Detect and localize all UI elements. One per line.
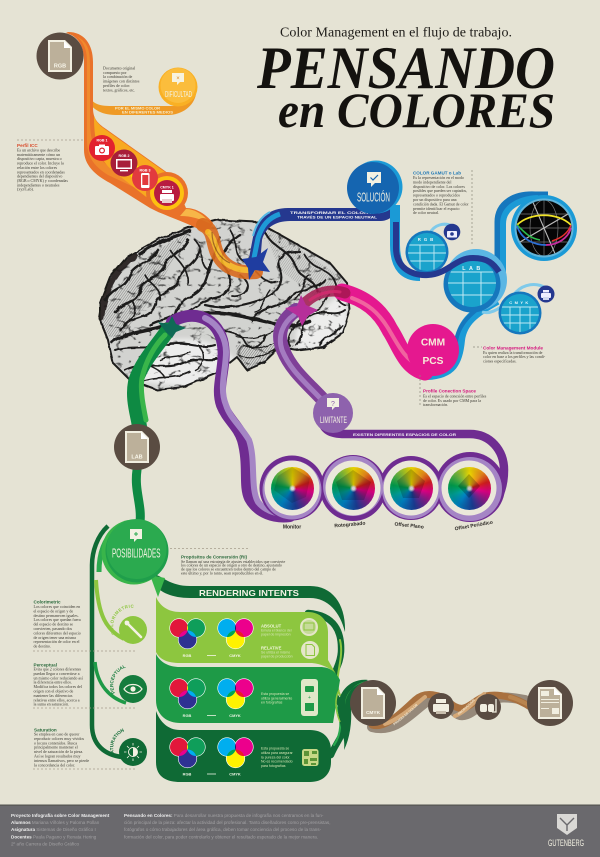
green ribbon: brain to lab	[134, 316, 186, 522]
wheel: monitor: Monitor	[283, 524, 301, 530]
text: perfil icc	[17, 140, 84, 192]
cmyk 1 badge: CMYK 1	[160, 186, 174, 190]
wheel: monitor	[264, 460, 320, 530]
solucion circle	[347, 160, 402, 214]
navy wave ribbon over tables	[396, 222, 499, 275]
dificultad circle: DIFICULTAD	[165, 89, 192, 99]
saturation node: SATURATION	[110, 728, 124, 753]
venn cmyk row 3	[217, 737, 254, 768]
footer description: Pensando en Colores: Para desarrollar nuestra propuesta de infografía nos centramos en la fun-	[124, 813, 323, 818]
blue ribbon: solucion to brain: TRAVÉS DE UN ESPACIO NEUTRAL	[297, 215, 378, 220]
panel: perceptual: CMYK	[229, 713, 241, 718]
footer description: formación del color, para poder controlarlo y obtener el resultado esperado de la mejor manera.	[124, 834, 318, 839]
dificultad circle	[158, 68, 198, 106]
text: colorimetric: representación de color en el	[34, 639, 80, 644]
brain illustration	[95, 215, 355, 395]
rgb 2 badge	[110, 150, 146, 178]
cmyk table circle: CMYK	[509, 300, 531, 305]
text: documento original: compuesto por	[103, 70, 127, 75]
subtitle: Color Management en el flujo de trabajo.	[280, 24, 512, 40]
posibilidades circle	[102, 519, 168, 584]
text: color gamut: condición dada. El Gamut de color	[413, 201, 469, 206]
text: profile conection space	[420, 375, 487, 407]
cmyk table circle	[498, 292, 542, 334]
limitante band: EXISTEN DIFERENTES ESPACIOS DE COLOR	[353, 432, 456, 437]
text: perceptual: Modifica todos los colores del	[34, 684, 83, 689]
panel: saturation: CMYK	[229, 772, 241, 776]
panel: absolut relative: Emula el blanco del	[261, 628, 292, 632]
purple ribbon: brain to wheels	[172, 316, 290, 516]
text: saturation: nivel de saturación de la pieza.	[34, 749, 83, 754]
text: perceptual: Evita que 2 colores diferentes	[34, 666, 81, 672]
text: documento original: textos, gráficos, etc.	[103, 87, 135, 93]
text: perfil icc: Perfil ICC	[17, 143, 38, 148]
doc circle: rgb: RGB	[54, 64, 66, 70]
text: perceptual	[33, 662, 135, 708]
text: documento original: perfiles de color:	[103, 83, 130, 88]
text: colorimetric: de destino.	[34, 644, 51, 649]
text: colorimetric: de origen tener una misma	[34, 635, 76, 640]
cmm pcs circle: CMM	[421, 338, 445, 348]
doc circle: cmyk	[350, 680, 396, 726]
dificultad circle: ×	[176, 76, 180, 82]
footer credits: Docentes Paula Pagano y Renata Hering	[11, 834, 96, 839]
panel: perceptual: en fotografías	[261, 701, 283, 705]
text: color gamut: de color neutral.	[413, 210, 439, 215]
text: perceptual: la suma en saturación.	[34, 702, 69, 706]
cmyk circle halo	[146, 172, 188, 214]
icon card: qr pattern	[302, 749, 318, 766]
text: color management module	[473, 346, 546, 364]
green arrow head	[158, 316, 186, 338]
doc circle: cmyk: CMYK	[366, 710, 381, 716]
doc circle: final print	[527, 680, 573, 726]
title	[256, 24, 555, 138]
text: color gamut: Es la representación en el modo	[413, 175, 464, 180]
orange ribbon: rgb to brain	[66, 32, 213, 234]
text: propositos de conversion: Se llaman así una estrategia de ajustes establecidos que convierte	[181, 559, 286, 564]
text: perceptual: un mismo color reduciendo así	[34, 675, 84, 680]
lab doc circle: LAB	[131, 454, 143, 460]
panel: saturation: RGB	[183, 772, 192, 776]
text: documento original: imágenes con distintos	[103, 79, 140, 84]
icon card: camera and image: +	[308, 695, 311, 701]
orange branch to dificultad: EN DIFERENTES MEDIOS	[122, 111, 174, 115]
orange ribbon inside brain	[203, 225, 256, 272]
rgb 2 badge: RGB 2	[119, 154, 129, 158]
footer description: fotógrafos o cómo trabajadores del área gráfica, deben tomar conciencia del proceso de la trans-	[124, 827, 322, 832]
text: propositos de conversion: los colores de un espacio de origen a otro de destino, ajustando	[181, 563, 282, 569]
rgb table circle: RGB	[418, 237, 436, 242]
cmyk 1 badge	[154, 180, 180, 206]
text: perfil icc: independientes o neutrales	[17, 182, 60, 187]
rgb 1 badge: RGB 1	[97, 138, 107, 142]
limitante band	[321, 418, 504, 512]
pink arrow head	[285, 295, 318, 326]
blue gamut ribbons	[395, 197, 548, 375]
limitante circle: ?	[331, 401, 335, 408]
wheel: rotograbado	[326, 460, 380, 529]
lab doc circle	[114, 424, 160, 470]
colorimetric node: COLORIMETRIC	[110, 604, 134, 635]
text: profile conection space: de color. Es usado por CMM para la	[423, 398, 481, 403]
pink ribbon: cmm to brain	[306, 291, 425, 372]
text: color management module: Color Management Module	[483, 346, 543, 350]
text: perfil icc: Es un archivo que describe	[17, 148, 60, 152]
text: profile conection space: Es el espacio de conexión entre perfiles	[423, 394, 487, 398]
main title line 1: PENSANDO	[256, 35, 555, 101]
venn rgb row 1	[169, 618, 206, 649]
venn rgb row 3	[169, 737, 206, 768]
text: saturation: principalmente mantener el	[34, 745, 79, 750]
wheel: offset periodico: Offset Periódico	[454, 520, 493, 532]
text: perfil icc: (xyz/Lab).	[17, 187, 34, 192]
text: saturation	[33, 728, 135, 769]
purple arrow: limitante to brain	[280, 295, 325, 402]
panel: saturation: utiliza para asegurar	[261, 751, 294, 755]
text: colorimetric: Los colores que quedan fuera	[34, 617, 81, 622]
wheel: offset plano: Offset Plano	[394, 521, 424, 531]
text: perceptual: origen con el objetivo de	[34, 688, 73, 694]
venn rgb row 2	[169, 678, 206, 709]
text: color gamut: modo independiente del	[413, 179, 452, 184]
wheel: offset periodico	[442, 460, 496, 532]
text: colorimetric: Colorimetric	[34, 600, 61, 604]
lab table circle	[444, 249, 507, 312]
footer credits: Asignatura Sistemas de Diseño Gráfico I	[11, 827, 96, 832]
text: colorimetric: destino permanecen iguales.	[34, 613, 79, 618]
text: profile conection space: Profile Conection Space	[423, 388, 476, 394]
rendering intents band	[150, 575, 345, 632]
text: color gamut: dispositivo de color. Los colores	[413, 184, 465, 189]
brown twisted ribbon: PRUEBA DE COLOR	[393, 704, 418, 726]
text: colorimetric: Los colores que coinciden en	[34, 604, 80, 609]
text: saturation: Se emplea en caso de querer	[34, 732, 80, 736]
text: perfil icc: dispositivo capta, muestra o	[17, 156, 62, 162]
panel: perceptual: Esta propuesta se	[261, 692, 289, 696]
icon: books circle	[475, 694, 501, 720]
posibilidades circle: POSIBILIDADES	[112, 546, 160, 560]
rgb 3 badge	[132, 165, 158, 191]
text: color gamut: permite identificar el espacio	[413, 206, 460, 211]
text: colorimetric: del espacio de destino se	[34, 622, 73, 627]
text: colorimetric: el espacio de origen y de	[34, 608, 73, 613]
panel: absolut relative: papel de impresión	[261, 632, 291, 636]
icon: printer circle	[428, 693, 454, 719]
sphere gamut	[511, 195, 577, 261]
doc circle: rgb	[36, 32, 84, 80]
orange branch to dificultad: POR EL MISMO COLOR	[115, 106, 160, 110]
rendering intents band: RENDERING INTENTS	[199, 589, 300, 598]
color wheels	[260, 452, 505, 532]
text: color gamut: por un dispositivo para una	[413, 197, 457, 202]
text: profile conection space: transformación.	[423, 402, 448, 407]
icon: camera	[444, 224, 460, 240]
solucion circle: SOLUCIÓN	[357, 190, 390, 204]
text: perceptual: relativas entre ellos, acerca a	[34, 697, 80, 703]
gutenberg logo	[548, 814, 584, 848]
icon card: camera and image	[301, 679, 318, 716]
wheel chain backing	[260, 452, 505, 522]
text: propositos de conversion	[170, 548, 286, 576]
text: documento original: la combinación de	[103, 74, 133, 79]
text: perceptual: puedan llegar a convertirse a	[34, 671, 80, 676]
panel: absolut relative: papel de producción	[261, 654, 293, 658]
footer credits: 2º año Carrera de Diseño Gráfico	[11, 842, 80, 847]
text: perfil icc: representados en coordenadas	[17, 169, 65, 174]
text: perceptual: Perceptual	[34, 662, 57, 668]
rgb 1 badge	[89, 135, 115, 161]
panel: absolut relative: RELATIVE	[261, 646, 282, 650]
text: perceptual: la diferencia entre ellos.	[34, 680, 72, 685]
perceptual node	[110, 665, 147, 703]
perceptual node: PERCEPTUAL	[110, 665, 126, 694]
text: colorimetric	[33, 600, 135, 651]
rgb 3 badge: RGB 3	[140, 168, 150, 172]
panel: absolut relative: CMYK	[229, 653, 241, 658]
text: saturation: la concordancia del color.	[34, 762, 75, 767]
blue ribbon: solucion to brain	[242, 205, 396, 280]
text: propositos de conversion: este último y, por lo tanto, sean reproducibles en él.	[181, 570, 263, 576]
venn cmyk row 2	[217, 678, 254, 709]
footer description: ción principal de la pieza: afectar la actividad del profesional. Tanto diseñadores como pre-prensistas,	[124, 820, 330, 825]
text: perfil icc: matemáticamente cómo un	[17, 152, 60, 157]
venn cmyk row 1	[217, 618, 254, 649]
text: saturation: Saturation	[34, 728, 57, 732]
text: perfil icc: reproduce el color. Incluye la	[17, 161, 64, 166]
text: saturation: o locura contenidos. Busca	[34, 740, 77, 745]
panel: perceptual	[156, 654, 340, 723]
cmm pcs circle: PCS	[423, 356, 444, 367]
panel: saturation: Esta propuesta se	[261, 746, 289, 750]
saturation node	[110, 728, 147, 766]
footer	[0, 804, 600, 857]
panel: saturation: la pureza del color.	[261, 755, 290, 759]
text: perfil icc: relación entre los colores	[17, 165, 58, 170]
brown twisted ribbon	[367, 691, 528, 734]
text: saturation: intensos llamativos, pero se pierde	[34, 758, 89, 764]
icon: printer	[538, 286, 554, 302]
blue arrow head	[242, 248, 270, 280]
text: color management module: Es quien realiza la transformación de	[483, 350, 543, 355]
cmm pcs circle	[407, 324, 459, 376]
blue ribbon: solucion to brain: TRANSFORMAR EL COLOR A	[290, 210, 374, 215]
green tree branches	[92, 526, 126, 757]
text: colorimetric: convierten, pasando dos	[34, 626, 72, 632]
panel: absolut relative: ABSOLUT	[261, 624, 282, 628]
text: saturation: Así se logran resultados muy	[34, 754, 80, 758]
text: color management module: ciones especificadas.	[483, 358, 517, 364]
panel: saturation	[156, 711, 331, 782]
panel: saturation: No es recomendado	[261, 760, 293, 764]
right green ribbons	[308, 613, 345, 755]
text: color gamut: representados o reproducidos	[413, 193, 460, 198]
limitante circle: LIMITANTE	[320, 415, 347, 426]
text: color management module: color en base a los perfiles y las condi-	[483, 354, 546, 359]
text: color gamut	[413, 170, 472, 245]
orange branch to dificultad	[86, 90, 196, 115]
text: perfil icc: dependientes del dispositivo	[17, 174, 62, 179]
wheel: rotograbado: Rotograbado	[334, 521, 366, 529]
main title line 2: en COLORES	[278, 82, 555, 138]
brown twisted ribbon: PRODUCCIÓN	[458, 698, 475, 715]
footer credits: Alumnos Mariana Viñoles y Paloma Pollan	[11, 820, 99, 825]
text: saturation: reproducir colores muy vívidos	[34, 736, 85, 741]
icon: monitor	[300, 618, 318, 636]
panel: perceptual: utiliza generalmente	[261, 696, 292, 700]
rgb table circle	[406, 230, 448, 274]
footer credits: Proyecto Infografía sobre Color Management	[11, 813, 110, 818]
text: color gamut: COLOR GAMUT o Lab	[413, 170, 461, 176]
text: propositos de conversion: Propósitos de Conversión (RI)	[181, 554, 247, 560]
text: perceptual: mantener las diferencias	[34, 693, 73, 698]
colorimetric node	[110, 604, 147, 644]
panel: absolut relative: RGB	[183, 653, 192, 658]
text: colorimetric: colores diferentes del espacio	[34, 630, 81, 635]
panel: absolut relative	[156, 597, 336, 674]
limitante circle	[313, 393, 353, 433]
panel: saturation: para fotografías	[261, 764, 286, 768]
wheel: offset plano	[384, 460, 438, 531]
icon: document	[301, 641, 319, 659]
text: documento original: Documento original	[103, 66, 136, 70]
lab table circle: LAB	[462, 266, 484, 272]
panel: absolut relative: Se utiliza el mismo	[261, 650, 290, 654]
text: color gamut: posibles que pueden ser captados,	[413, 188, 467, 194]
panel: perceptual: RGB	[183, 713, 192, 718]
cmyk leaf green	[336, 680, 368, 750]
text: perfil icc: (RGB o CMYK) y coordenadas	[17, 178, 68, 183]
text: propositos de conversion: de que los colores se encuentren todos dentro del campo de	[181, 567, 276, 572]
